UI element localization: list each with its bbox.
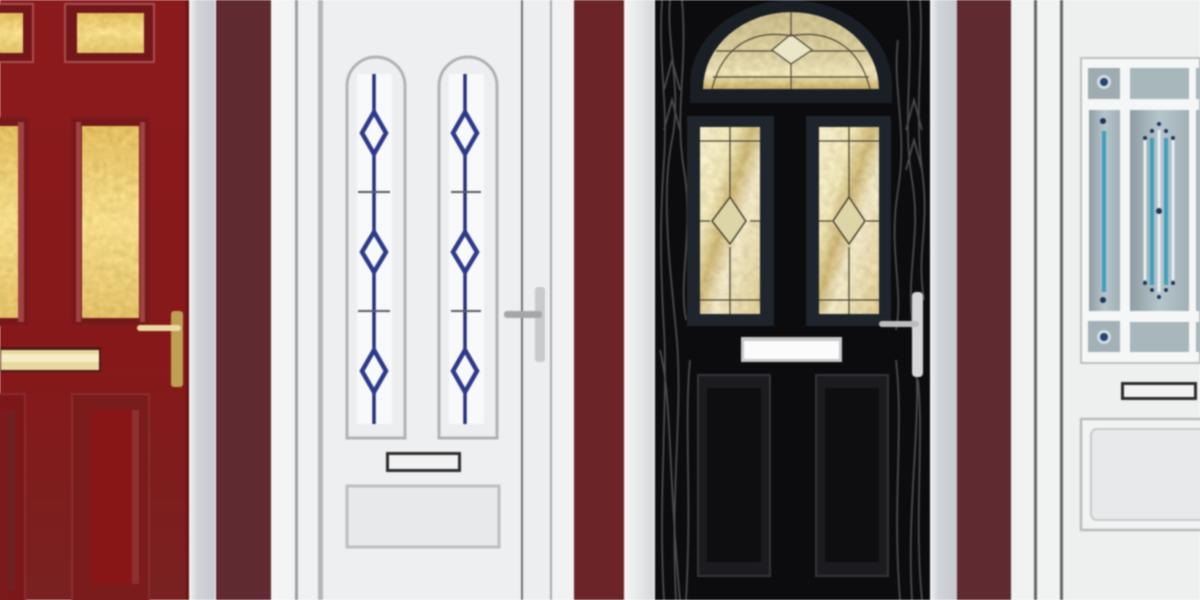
raised panel xyxy=(1081,419,1200,530)
left arched window xyxy=(347,57,405,438)
glazing grid xyxy=(1081,58,1200,363)
right leaded window xyxy=(806,116,891,326)
raised panel xyxy=(347,486,499,547)
handle xyxy=(504,287,545,362)
letterbox xyxy=(1121,382,1197,400)
right arched window xyxy=(439,57,497,438)
red door xyxy=(0,0,215,600)
red door frame xyxy=(189,0,215,600)
lower panels xyxy=(698,375,888,576)
white door with blue glass xyxy=(1011,0,1200,600)
white door with blue leaded glass xyxy=(271,0,574,600)
top glazed panels xyxy=(0,4,154,62)
letterbox xyxy=(386,452,461,472)
left leaded window xyxy=(687,116,774,326)
black door xyxy=(624,0,957,600)
handle xyxy=(879,292,923,377)
wood grain xyxy=(660,0,925,600)
handle xyxy=(137,311,183,387)
letterbox xyxy=(741,337,842,362)
middle glazed panels xyxy=(0,104,149,325)
letterbox xyxy=(0,347,101,372)
fanlight arch xyxy=(690,0,892,103)
lower panels xyxy=(0,394,149,600)
